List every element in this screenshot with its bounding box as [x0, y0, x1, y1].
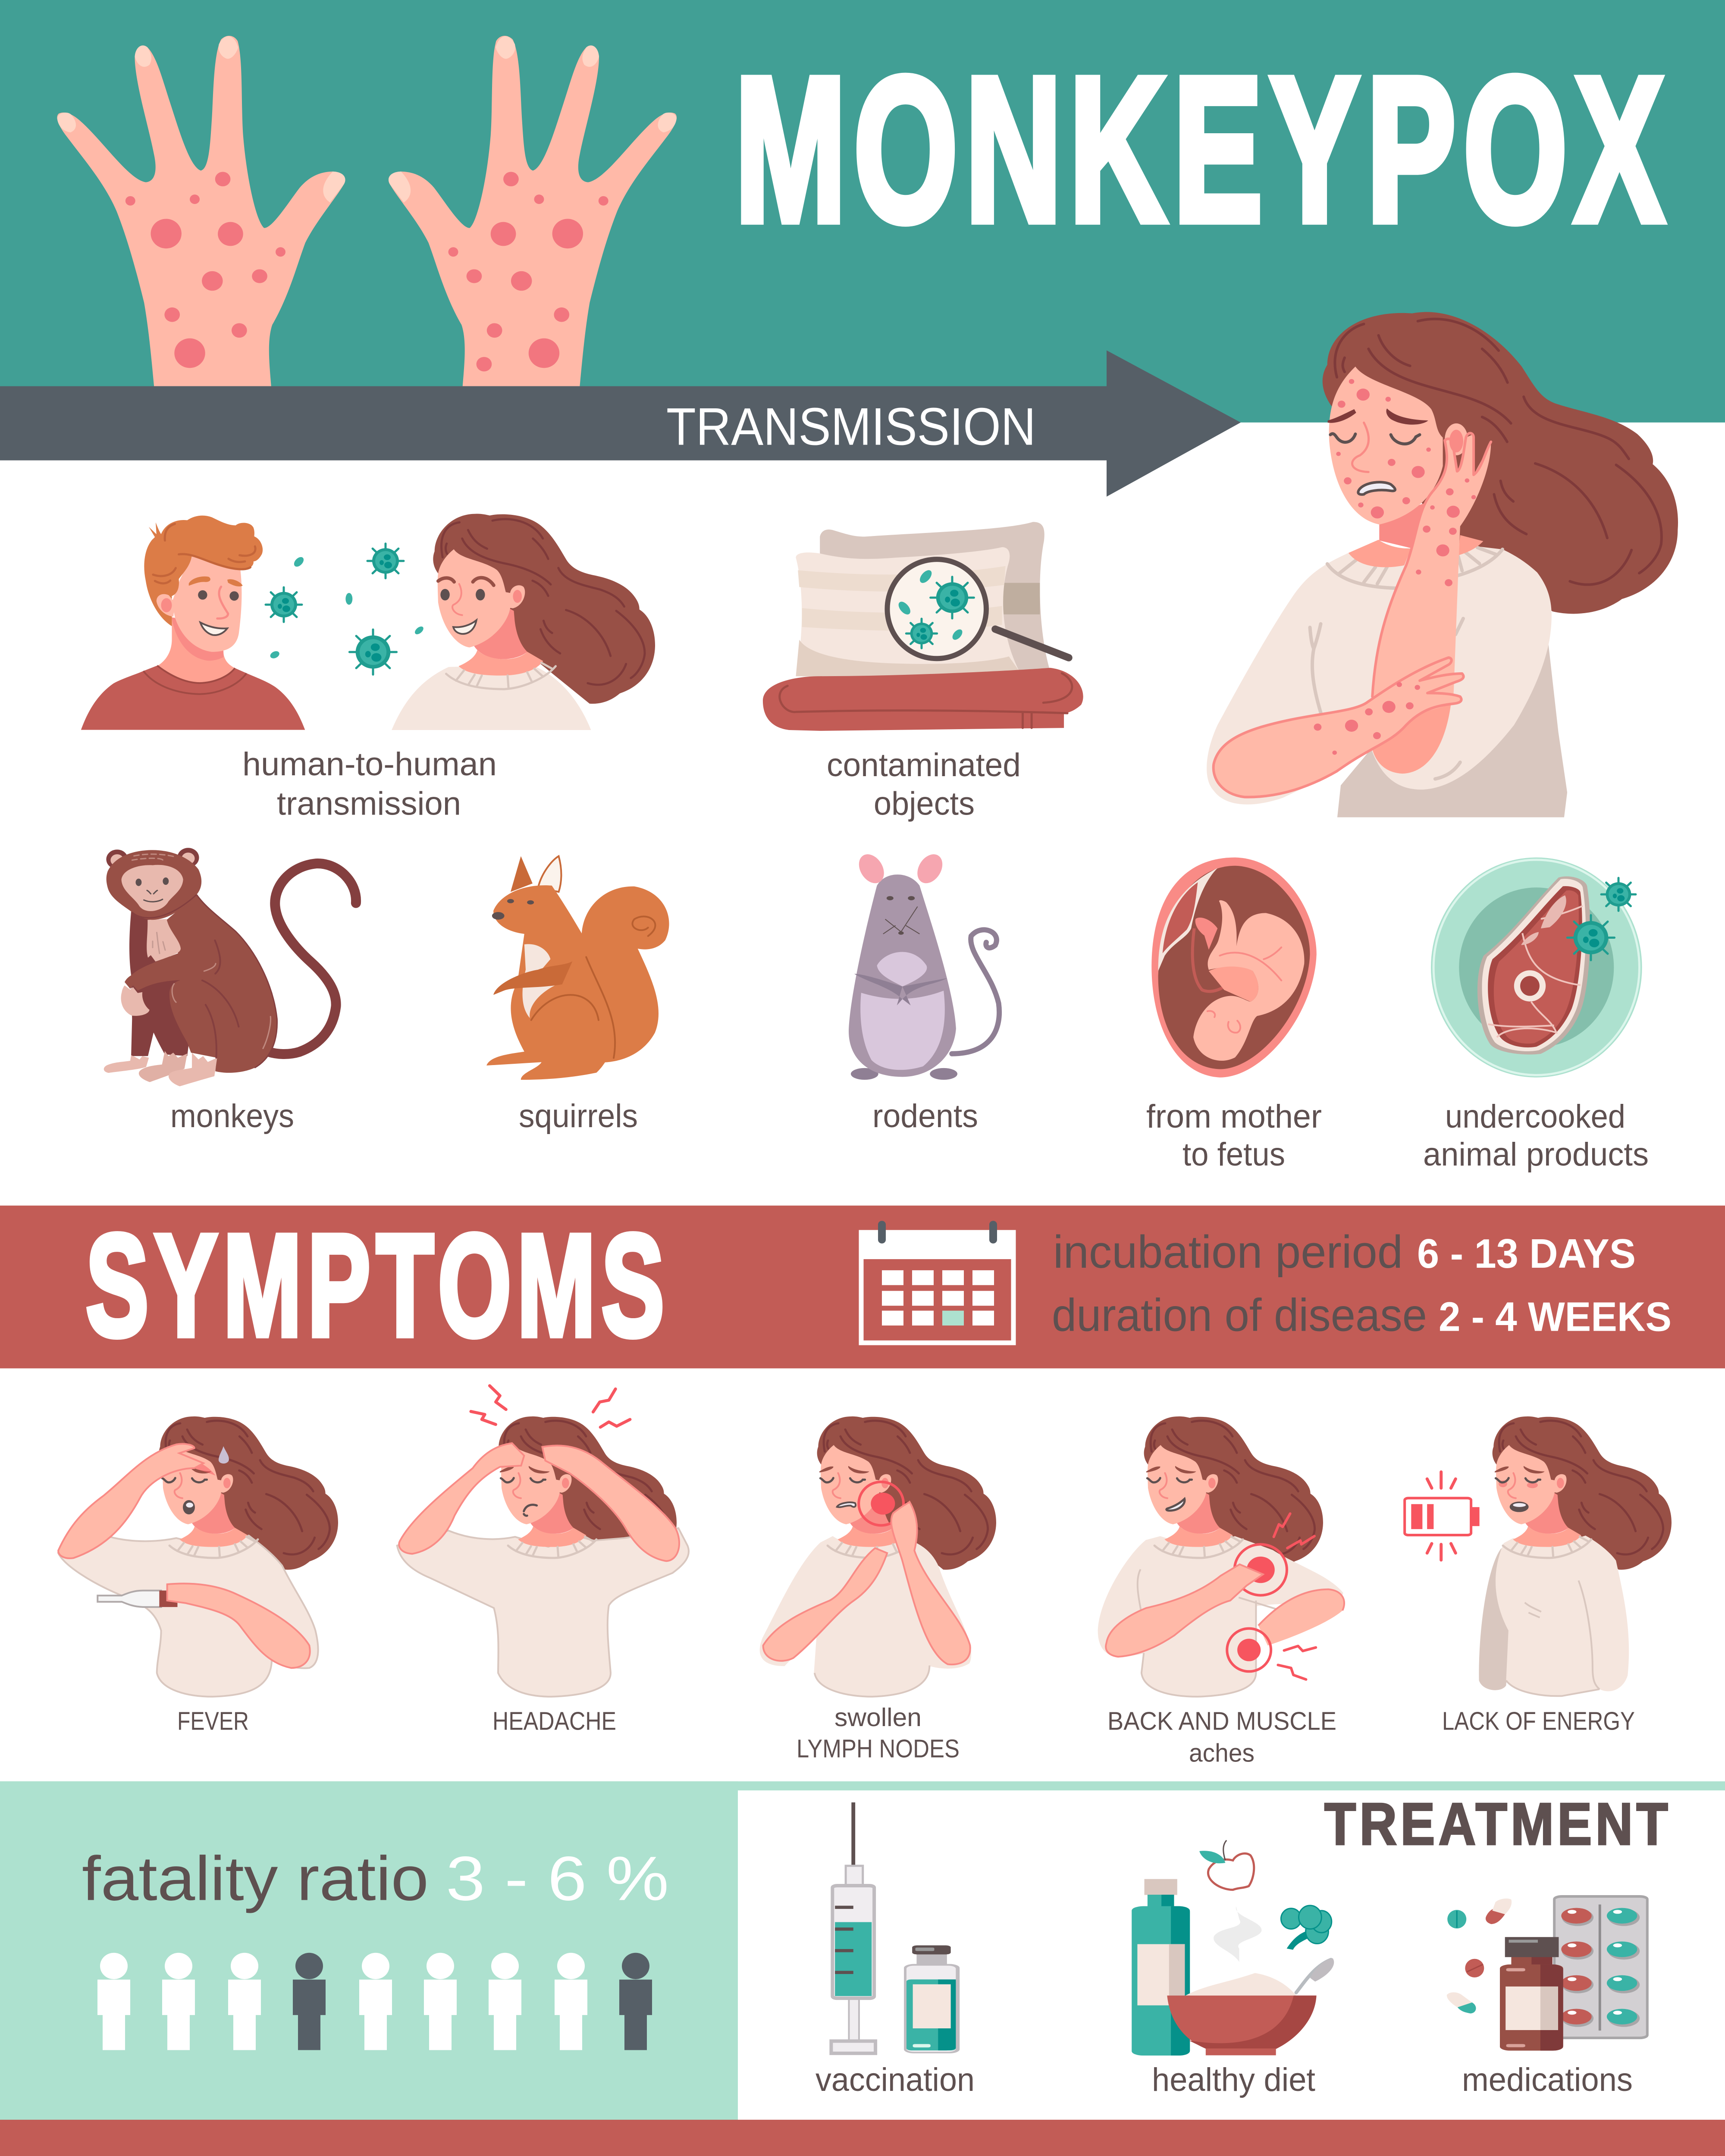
fatality text: fatality ratio — [82, 1843, 429, 1914]
symptom: headache — [397, 1386, 689, 1697]
heading: symptoms: SYMPTOMS — [86, 1204, 670, 1366]
label: from mother to fetus: from mother — [1146, 1098, 1322, 1135]
label: back and muscle aches: aches — [1189, 1739, 1255, 1767]
label: back and muscle aches — [1107, 1707, 1336, 1767]
duration text — [1052, 1290, 1672, 1341]
label: squirrels: squirrels — [519, 1097, 638, 1134]
label: vaccination: vaccination — [815, 2061, 975, 2098]
illustration: squirrel — [486, 856, 669, 1080]
label: human-to-human: human-to-human — [242, 746, 497, 783]
label: undercooked animal products: undercooked — [1445, 1098, 1625, 1135]
symptom: swollen lymph nodes — [760, 1416, 996, 1697]
icon: calendar — [861, 1221, 1013, 1343]
label: undercooked animal products — [1423, 1098, 1649, 1173]
illustration: rodent — [849, 853, 999, 1080]
illustration: monkey — [104, 848, 356, 1086]
symptom: fever — [58, 1416, 338, 1697]
icon: viruses on meat — [1567, 878, 1636, 960]
panel: fatality ratio — [0, 1781, 1725, 2122]
label: contaminated objects: contaminated — [827, 746, 1021, 783]
label: headache: HEADACHE — [492, 1707, 616, 1735]
woman — [392, 514, 655, 730]
label: monkeys: monkeys — [170, 1097, 294, 1134]
icon: low battery — [1405, 1472, 1480, 1560]
heading: transmission: TRANSMISSION — [666, 397, 1036, 456]
icon: viruses in magnifier — [906, 577, 974, 648]
label: from mother to fetus — [1146, 1098, 1322, 1173]
left hand — [57, 36, 345, 386]
label: contaminated objects — [827, 746, 1021, 822]
label: swollen lymph nodes — [797, 1703, 960, 1763]
label: back and muscle aches: BACK AND MUSCLE — [1107, 1707, 1336, 1735]
label: human-to-human — [242, 746, 497, 822]
duration text: 2 - 4 WEEKS — [1439, 1293, 1672, 1340]
icon: viruses — [266, 544, 404, 674]
icon: medications — [1447, 1896, 1647, 2051]
label: from mother to fetus: to fetus — [1182, 1136, 1285, 1173]
pictogram: people — [97, 1953, 652, 2050]
label: swollen lymph nodes: swollen — [834, 1703, 922, 1732]
symptom: lack of energy — [1479, 1416, 1672, 1696]
label: fever: FEVER — [177, 1707, 249, 1735]
illustration: undercooked meat — [1431, 857, 1642, 1078]
illustration: mother to fetus — [1151, 857, 1317, 1078]
label: medications: medications — [1462, 2061, 1633, 2098]
right hand — [389, 36, 677, 386]
man — [81, 516, 305, 730]
incubation text: incubation period — [1053, 1226, 1403, 1278]
illustration: contaminated objects — [763, 522, 1083, 731]
illustration: human-to-human transmission — [81, 514, 655, 730]
header band — [0, 0, 1725, 423]
duration text: duration of disease — [1052, 1290, 1427, 1341]
incubation text — [1053, 1226, 1636, 1278]
label: human-to-human: transmission — [277, 785, 461, 822]
label: undercooked animal products: animal products — [1423, 1136, 1649, 1173]
icon: two hands with rash — [57, 36, 677, 386]
icon: healthy diet — [1132, 1840, 1334, 2056]
fatality text — [82, 1843, 669, 1914]
banner: symptoms — [0, 1206, 1725, 1368]
label: contaminated objects: objects — [874, 785, 975, 822]
fatality text: 3 - 6 % — [446, 1843, 669, 1914]
label: swollen lymph nodes: LYMPH NODES — [797, 1734, 960, 1763]
arrow: transmission banner — [0, 350, 1241, 497]
label: rodents: rodents — [872, 1097, 978, 1134]
droplets — [268, 556, 425, 659]
label: healthy diet: healthy diet — [1152, 2061, 1315, 2098]
footer band — [0, 2120, 1725, 2156]
icon: syringe and vial — [831, 1802, 960, 2053]
label: lack of energy: LACK OF ENERGY — [1442, 1707, 1635, 1735]
illustration: sick woman with rash — [1207, 312, 1678, 817]
symptom: back and muscle aches — [1098, 1416, 1344, 1697]
incubation text: 6 - 13 DAYS — [1417, 1230, 1636, 1277]
